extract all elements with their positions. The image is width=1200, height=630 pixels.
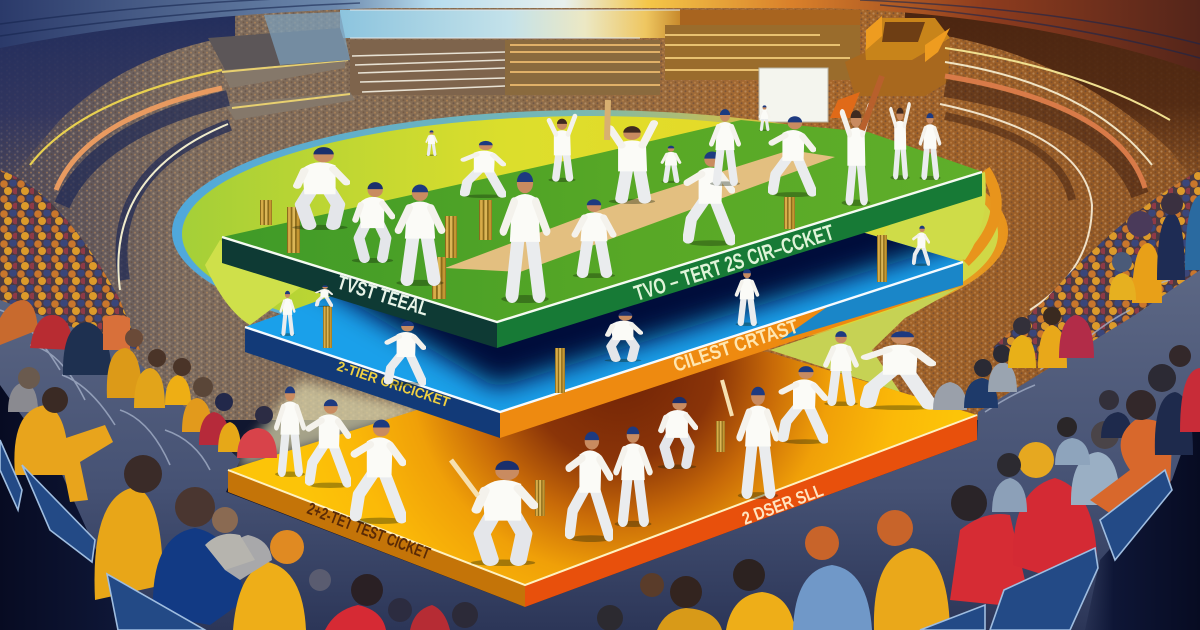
tier 1: green platform xyxy=(222,120,983,348)
tier 2 left label: 2-TIER CRICICKET xyxy=(335,358,452,410)
tier 2: blue platform xyxy=(244,232,964,438)
players on yellow tier xyxy=(275,331,934,566)
cricket field xyxy=(172,110,1008,354)
right spectators xyxy=(657,193,1200,630)
lower pale ground xyxy=(235,380,430,470)
stumps xyxy=(260,197,887,516)
left spectators xyxy=(0,300,478,630)
dark right corner xyxy=(1085,400,1200,630)
mid-distance right crowd xyxy=(990,170,1200,370)
lower spectators row xyxy=(205,507,664,630)
back grandstand xyxy=(208,12,860,120)
aisle railings xyxy=(0,250,1200,470)
tier 3 left label: 2+2-TET TEST CICKET xyxy=(305,499,433,563)
tier 2 right label: CILEST CRTAST xyxy=(671,316,801,377)
tier 3: yellow platform xyxy=(228,340,977,607)
dark left corner xyxy=(0,385,150,630)
tier 3 right label: 2 DSER SLL xyxy=(739,480,826,529)
roof and sky xyxy=(0,0,1200,72)
bowler's bat xyxy=(607,100,608,140)
players on green tier xyxy=(292,105,941,303)
batter's raised bat xyxy=(862,76,882,130)
seating aisle xyxy=(0,270,1200,630)
gold corporate box xyxy=(830,16,950,118)
stadium stands xyxy=(0,0,1200,420)
scoreboard xyxy=(759,68,828,122)
mid-distance left crowd xyxy=(0,170,140,350)
tier 1 left label: TVST TEEAL xyxy=(335,272,431,321)
players on blue tier xyxy=(280,226,930,386)
blue stadium seats xyxy=(0,440,1172,630)
pitch xyxy=(445,150,835,272)
stand tier arcs xyxy=(30,48,1170,310)
tier 1 right label: TVO – TERT 2S CIR–CCKET xyxy=(631,219,837,306)
right lime ground xyxy=(770,287,960,392)
